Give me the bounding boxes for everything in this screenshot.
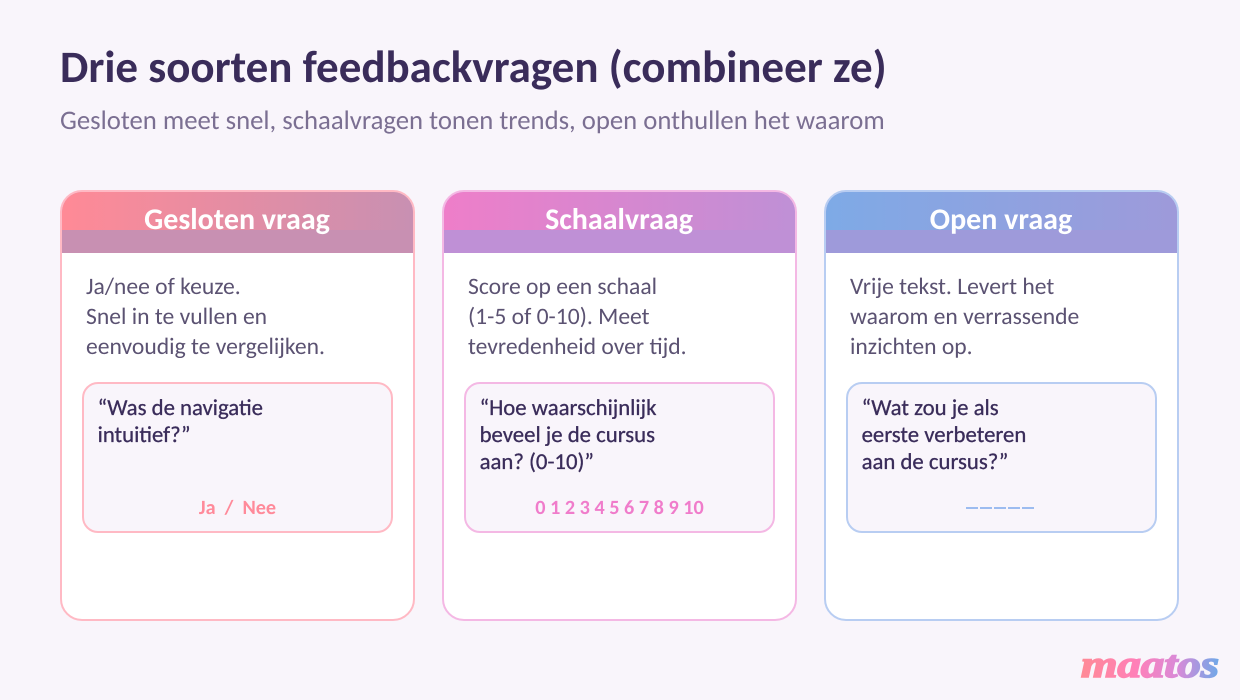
example question: aan? (0-10)” [480, 448, 594, 476]
description: gesloten vraag [86, 273, 325, 361]
answer format: ja / nee: Ja / Nee [199, 496, 276, 520]
description: gesloten vraag: eenvoudig te vergelijken. [86, 333, 325, 361]
example question: aan de cursus?” [862, 448, 1008, 476]
example question: intuitief?” [98, 421, 191, 449]
description: schaalvraag [468, 273, 687, 361]
panel: gesloten vraag [60, 190, 415, 621]
example box: schaalvraag [464, 382, 775, 533]
example question: beveel je de cursus [480, 421, 655, 449]
header: open vraag: Open vraag [930, 201, 1072, 238]
example question: “Was de navigatie [98, 394, 263, 422]
example question: “Wat zou je als [862, 394, 999, 422]
panel: schaalvraag [442, 190, 797, 621]
title: Drie soorten feedbackvragen (combineer ze) [60, 40, 887, 95]
description: open vraag: waarom en verrassende [850, 303, 1079, 331]
header: schaalvraag: Schaalvraag [545, 201, 693, 238]
description: open vraag [850, 273, 1079, 361]
example question [98, 394, 263, 449]
answer format: scale 0-10: 0 1 2 3 4 5 6 7 8 9 10 [535, 496, 704, 520]
description: schaalvraag: (1-5 of 0-10). Meet [468, 303, 650, 331]
example box: gesloten vraag [82, 382, 393, 533]
header: open vraag [826, 192, 1177, 253]
subtitle: Gesloten meet snel, schaalvragen tonen trends, open onthullen het waarom [60, 105, 885, 137]
description: schaalvraag: tevredenheid over tijd. [468, 333, 687, 361]
example question [480, 394, 656, 476]
example question: eerste verbeteren [862, 421, 1026, 449]
description: schaalvraag: Score op een schaal [468, 273, 657, 301]
answer format: blank line [966, 507, 1036, 509]
example box: open vraag [846, 382, 1157, 533]
description: open vraag: inzichten op. [850, 333, 973, 361]
description: gesloten vraag: Snel in te vullen en [86, 303, 267, 331]
description: gesloten vraag: Ja/nee of keuze. [86, 273, 241, 301]
header: schaalvraag [444, 192, 795, 253]
example question [862, 394, 1026, 476]
example question: “Hoe waarschijnlijk [480, 394, 656, 422]
header: gesloten vraag: Gesloten vraag [144, 201, 330, 238]
description: open vraag: Vrije tekst. Levert het [850, 273, 1054, 301]
header: gesloten vraag [62, 192, 413, 253]
logo: maatos: maatos [1081, 644, 1219, 686]
panel: open vraag [824, 190, 1179, 621]
